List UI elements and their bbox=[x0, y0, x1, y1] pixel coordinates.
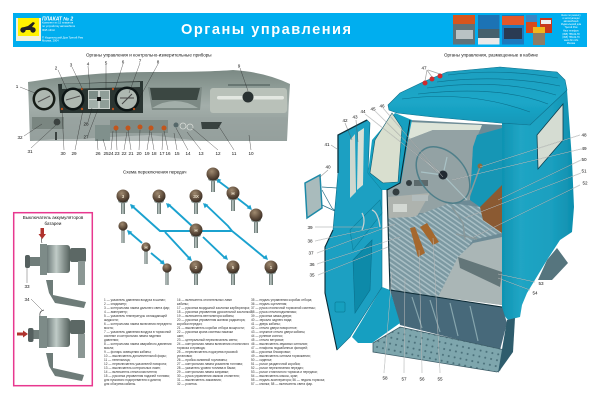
legend column 2: 18 — рукоятка управления дроссельной заслонкой; bbox=[177, 310, 253, 314]
dashboard numbers and leaders: 10 bbox=[248, 151, 254, 156]
glove box bbox=[148, 87, 202, 110]
roof bbox=[388, 67, 567, 125]
dashboard numbers and leaders: 17 bbox=[159, 151, 165, 156]
cab callouts: 56 bbox=[419, 376, 425, 382]
legend column 1: для обогрева кабины. bbox=[104, 382, 136, 386]
rear window view bbox=[407, 122, 482, 140]
windshield bbox=[370, 113, 402, 183]
publisher contact text: www.3rm.info bbox=[564, 39, 579, 42]
truck cab illustration bbox=[305, 67, 574, 373]
floor bbox=[388, 203, 502, 297]
dashboard numbers and leaders bbox=[16, 58, 254, 156]
heading: gear shift: Схема переключения передач bbox=[123, 170, 187, 174]
legend column 1: 1 — указатель давления воздуха в шинах; bbox=[104, 298, 166, 302]
cab callouts: 36 bbox=[309, 262, 315, 267]
dashboard numbers and leaders: 1 bbox=[16, 84, 19, 89]
legend column 3: 50 — сиденье; bbox=[251, 358, 272, 362]
legend column 3: 57 — кнопка; 58 — включатель света фар. bbox=[251, 382, 313, 386]
dashboard numbers and leaders: 29 bbox=[71, 151, 77, 156]
legend column 1: масла; bbox=[104, 346, 114, 350]
legend column 2: 16 — включатель отопительных ламп bbox=[177, 298, 232, 302]
cab callouts: 58 bbox=[382, 376, 388, 380]
legend column 1: 5 — указатель температуры охлаждающей bbox=[104, 314, 167, 318]
dashboard numbers and leaders: 31 bbox=[27, 149, 33, 154]
legend column 3: 42 — стекло двери поворотное; bbox=[251, 326, 297, 330]
lower switch panel bbox=[32, 117, 222, 141]
knob labels: 2 bbox=[195, 265, 198, 270]
dashboard numbers and leaders: 20 bbox=[136, 151, 142, 156]
legend column 1 bbox=[104, 298, 172, 386]
legend column 3 bbox=[251, 298, 325, 386]
legend column 1: 13 — выключатель контрольных ламп; bbox=[104, 366, 161, 370]
step plate bbox=[373, 327, 505, 372]
steering column and levers bbox=[452, 167, 480, 240]
title: Органы управления bbox=[181, 22, 353, 38]
knob labels: Н bbox=[144, 245, 148, 250]
legend column 3: 37 — ручка стояночной тормозной системы; bbox=[251, 306, 316, 310]
legend column 1: 10 — выключатель дополнительной фары; bbox=[104, 354, 167, 358]
knob labels: 4 bbox=[158, 194, 161, 199]
dashboard numbers and leaders: 30 bbox=[60, 151, 66, 156]
cab callouts: 44 bbox=[360, 109, 366, 114]
legend column 2: 23 — центральный переключатель света; bbox=[177, 338, 238, 342]
legend column 2: 28 — указатель уровня топлива в баках; bbox=[177, 366, 236, 370]
legend column 3: 44 — рулевое колесо; bbox=[251, 334, 283, 338]
cab callouts: 55 bbox=[437, 376, 443, 382]
publisher contact text: Москва bbox=[567, 42, 576, 45]
heading: dashboard: Органы управления и контрольно-измерительные приборы bbox=[86, 52, 212, 58]
legend column 2: 31 — выключатель зажигания; bbox=[177, 378, 222, 382]
gauge 7 bbox=[114, 86, 140, 112]
dashboard numbers and leaders: 32 bbox=[17, 135, 23, 140]
legend column 1: 7 — указатель давления воздуха в тормозной bbox=[104, 330, 171, 334]
dashboard numbers and leaders: 7 bbox=[139, 58, 142, 64]
door bbox=[325, 120, 382, 350]
legend column 2: 30 — ручка управления замком отопителя; bbox=[177, 374, 240, 378]
radio panel bbox=[210, 84, 287, 113]
poster info text: Комплект из 15 плакатов bbox=[42, 20, 74, 24]
side window bbox=[537, 104, 563, 169]
legend column 3: 52 — рычаг переключения передач; bbox=[251, 366, 304, 370]
dashboard numbers and leaders: 3 bbox=[70, 62, 73, 68]
legend column 2: шин; bbox=[177, 334, 184, 338]
poster info text: ПЛАКАТ № 2 bbox=[42, 16, 73, 22]
publisher contact text: автомобилей bbox=[564, 20, 579, 23]
legend column 2: установки; bbox=[177, 354, 193, 358]
dashboard numbers and leaders: 25 bbox=[103, 151, 109, 156]
battery switch heading: батареи bbox=[45, 221, 62, 226]
legend column 3: 35 — педаль управления коробки отбора; bbox=[251, 298, 312, 302]
dashboard numbers and leaders: 26 bbox=[95, 151, 101, 156]
door handles bbox=[362, 210, 380, 230]
cab callouts: 50 bbox=[581, 157, 587, 162]
heading: cab: Органы управления, размещенные в кабине bbox=[444, 52, 539, 58]
mirror arms bbox=[322, 187, 337, 212]
knob labels: 1 bbox=[270, 265, 273, 270]
legend column 2: 17 — рукоятка воздушной заслонки карбюратора; bbox=[177, 306, 250, 310]
legend column 1: моста; bbox=[104, 326, 114, 330]
legend column 1: 6 — контрольная лампа включения переднего bbox=[104, 322, 172, 326]
legend column 1: 8 — контрольная лампа аварийного давления bbox=[104, 342, 172, 346]
legend column 1: системе и контрольная лампа падения bbox=[104, 334, 161, 338]
legend column 2 bbox=[177, 298, 253, 386]
dashboard numbers and leaders: 15 bbox=[174, 151, 180, 156]
dashboard numbers and leaders: 19 bbox=[144, 151, 150, 156]
interior background bbox=[387, 120, 502, 305]
callouts 33 34: 34 bbox=[24, 297, 30, 302]
publisher contact text: Третий Рим bbox=[565, 26, 578, 29]
gauge 2 bbox=[62, 88, 84, 110]
panel: battery switch bbox=[14, 213, 92, 386]
cab callouts: 54 bbox=[532, 290, 538, 296]
dashboard numbers and leaders: 22 bbox=[121, 151, 127, 156]
cab callouts: 47 bbox=[421, 66, 427, 70]
book covers bbox=[453, 15, 552, 45]
publisher contact text bbox=[561, 14, 582, 45]
legend column 3: 53 — рычаг стояночного тормоза и передачи; bbox=[251, 370, 318, 374]
legend column 2: 26 — пробка заливной горловины; bbox=[177, 358, 227, 362]
cab callouts: 48 bbox=[581, 132, 587, 138]
legend column 3: 39 — рукоятка замка двери; bbox=[251, 314, 292, 318]
side rail bbox=[498, 318, 515, 373]
lower wing bbox=[352, 287, 400, 343]
knob labels bbox=[122, 191, 273, 270]
lower dash panel bbox=[388, 193, 430, 225]
knob labels: ЗХ bbox=[193, 194, 199, 199]
legend column 3: 48 — рукоятка блокировки; bbox=[251, 350, 291, 354]
dashboard numbers and leaders: 21 bbox=[128, 151, 134, 156]
roof lights bbox=[422, 74, 442, 86]
legend column 1: 15 — рукоятка управления подачей топлива; bbox=[104, 374, 170, 378]
icon: truck logo bbox=[16, 18, 41, 41]
header banner bbox=[13, 13, 587, 47]
battery switch heading: Выключатель аккумуляторов bbox=[23, 215, 84, 220]
cab rear wall bbox=[502, 90, 574, 320]
shift arrows bbox=[127, 178, 268, 265]
callouts 33 34 bbox=[24, 268, 42, 310]
gear shift diagram bbox=[116, 168, 278, 285]
bench bbox=[438, 237, 502, 305]
warning lamps bbox=[61, 88, 135, 110]
legend column 1: для пускового подогревателя и дизеля; bbox=[104, 378, 161, 382]
cab callouts: 43 bbox=[352, 114, 358, 120]
publisher contact text: Издательский дом bbox=[561, 23, 582, 26]
instrument cluster panel bbox=[58, 81, 143, 113]
legend text columns bbox=[104, 298, 325, 386]
cab callouts: 41 bbox=[324, 142, 330, 147]
pedals bbox=[410, 227, 425, 257]
cab callouts: 38 bbox=[307, 238, 313, 244]
switch lower bbox=[28, 310, 85, 381]
legend column 2: 25 — переключатель подогрева пусковой bbox=[177, 350, 238, 354]
bench controls bbox=[458, 257, 502, 287]
dashboard numbers and leaders: 14 bbox=[185, 151, 191, 156]
poster info text: ЗИЛ-131Н bbox=[42, 28, 55, 32]
dashboard illustration bbox=[28, 70, 290, 141]
legend column 2: 22 — рукоятка крана системы накачки bbox=[177, 330, 233, 334]
legend column 3: 38 — ручка стеклоподъемника; bbox=[251, 310, 297, 314]
legend column 1: жидкости; bbox=[104, 318, 119, 322]
cab callouts: 52 bbox=[582, 180, 588, 186]
cab callouts: 53 bbox=[538, 281, 544, 286]
under-body bracket bbox=[538, 248, 568, 280]
arrow: upper press bbox=[38, 228, 46, 239]
front pillar bbox=[368, 113, 412, 190]
cab callouts: 37 bbox=[308, 250, 314, 256]
legend column 3: 54 — выключатель массы, кран; bbox=[251, 374, 298, 378]
seat bbox=[480, 185, 502, 233]
dashboard numbers and leaders: 6 bbox=[122, 60, 125, 64]
legend column 2: 32 — розетка. bbox=[177, 382, 198, 386]
poster info text: © Издательский Дом Третий Рим bbox=[42, 36, 83, 40]
door windows bbox=[350, 134, 356, 198]
cab callouts: 49 bbox=[581, 146, 587, 151]
legend column 1: 14 — включатель стеклоочистителя; bbox=[104, 370, 157, 374]
dashboard numbers and leaders: 27 bbox=[83, 134, 89, 140]
legend column 1: 11 — пепельница; bbox=[104, 358, 130, 362]
legend column 3: 55 — педаль акселератора; 56 — педаль тормоза; bbox=[251, 378, 325, 382]
dashboard numbers and leaders: 24 bbox=[108, 151, 114, 156]
legend column 3: 41 — дверь кабины; bbox=[251, 322, 281, 326]
mirror bbox=[305, 175, 322, 218]
legend column 2: 21 — выключатель коробки отбора мощности; bbox=[177, 326, 245, 330]
dashboard numbers and leaders: 12 bbox=[215, 151, 221, 156]
legend column 1: 3 — контрольная лампа дальнего света фар; bbox=[104, 306, 170, 310]
knob labels: Н bbox=[194, 228, 198, 233]
cab callouts: 35 bbox=[309, 272, 315, 278]
dashboard numbers and leaders: 5 bbox=[105, 60, 108, 66]
legend column 1: 4 — амперметр; bbox=[104, 310, 128, 314]
legend column 3: 36 — педаль сцепления; bbox=[251, 302, 287, 306]
legend column 3: 45 — стекло ветровое; bbox=[251, 338, 284, 342]
legend column 3: 40 — зеркало заднего вида; bbox=[251, 318, 292, 322]
dashboard numbers and leaders: 28 bbox=[83, 122, 89, 126]
legend column 1: давления; bbox=[104, 338, 119, 342]
cab callouts: 57 bbox=[401, 376, 407, 382]
cab callouts: 51 bbox=[581, 168, 587, 174]
dashboard numbers and leaders: 13 bbox=[198, 151, 204, 156]
dashboard numbers and leaders: 9 bbox=[238, 64, 241, 68]
publisher contact text: (095) 785-02-78 bbox=[562, 33, 580, 36]
gauge 1 bbox=[32, 88, 56, 110]
dashboard numbers and leaders: 16 bbox=[165, 151, 171, 156]
publisher contact text: (095) 785-02-79 bbox=[562, 36, 580, 39]
legend column 2: коробки передач; bbox=[177, 322, 202, 326]
legend column 2: 24 — контрольная лампа включения стояночного bbox=[177, 342, 249, 346]
legend column 2: 20 — рукоятка управления жалюзи радиатора; bbox=[177, 318, 246, 322]
legend column 3: 51 — рычаг раздаточной коробки; bbox=[251, 362, 301, 366]
cab callouts: 39 bbox=[307, 225, 313, 230]
center gauges bbox=[88, 90, 110, 109]
legend column 1: 9 — фонарь освещения кабины; bbox=[104, 350, 151, 354]
legend column 1: 2 — спидометр; bbox=[104, 302, 127, 306]
back step panel bbox=[390, 290, 507, 350]
cab callouts: 42 bbox=[342, 118, 348, 123]
cab callouts: 40 bbox=[325, 164, 331, 170]
legend column 2: 27 — контрольная лампа указателя топлива; bbox=[177, 362, 243, 366]
arrow: lower press bbox=[17, 330, 28, 338]
poster info text: по устройству автомобиля bbox=[42, 24, 76, 28]
legend column 3: 49 — выключатель сигнала торможения; bbox=[251, 354, 311, 358]
shift knobs bbox=[116, 168, 278, 285]
publisher contact text: Книги по ремонту bbox=[561, 14, 582, 17]
far door bbox=[470, 128, 502, 207]
legend column 2: кабины; bbox=[177, 302, 189, 306]
lever knob bbox=[478, 164, 482, 168]
publisher contact text: Наш телефон: bbox=[563, 30, 579, 32]
door inner panels bbox=[353, 240, 372, 313]
legend column 2: 19 — включатель вентилятора кабины; bbox=[177, 314, 234, 318]
cab callouts: 45 bbox=[370, 106, 376, 112]
dashboard numbers and leaders: 23 bbox=[114, 151, 120, 156]
legend column 3: 43 — опускное стекло двери кабины; bbox=[251, 330, 305, 334]
callouts 33 34: 33 bbox=[24, 284, 30, 289]
legend column 1: 12 — переключатель указателей поворота; bbox=[104, 362, 167, 366]
switch upper bbox=[25, 236, 86, 308]
battery switch heading bbox=[23, 215, 84, 226]
legend column 3: 46 — выключатель звуковых сигналов; bbox=[251, 342, 308, 346]
steering wheel bbox=[405, 136, 481, 214]
cab callouts: 46 bbox=[379, 104, 385, 108]
poster info text bbox=[42, 16, 83, 42]
dashboard numbers and leaders: 11 bbox=[232, 151, 237, 156]
dashboard numbers and leaders: 18 bbox=[151, 151, 157, 156]
poster info text: Москва, 2004 bbox=[42, 38, 59, 42]
legend column 2: 29 — контрольная лампа заправки; bbox=[177, 370, 229, 374]
dashboard numbers and leaders: 4 bbox=[87, 62, 90, 66]
publisher contact text: и эксплуатации bbox=[562, 17, 580, 20]
legend column 3: 47 — плафоны подкабинных фонарей; bbox=[251, 346, 308, 350]
dashboard numbers and leaders: 2 bbox=[55, 66, 58, 70]
knob labels: 3 bbox=[122, 194, 125, 199]
knob labels: 5 bbox=[232, 265, 235, 270]
dashboard numbers and leaders: 8 bbox=[157, 60, 160, 64]
knob labels: Н bbox=[231, 191, 235, 196]
interior dash bbox=[387, 130, 480, 213]
instrument cluster on cab dash bbox=[392, 180, 428, 212]
cab callouts bbox=[307, 66, 588, 382]
legend column 2: тормоза и привода; bbox=[177, 346, 206, 350]
